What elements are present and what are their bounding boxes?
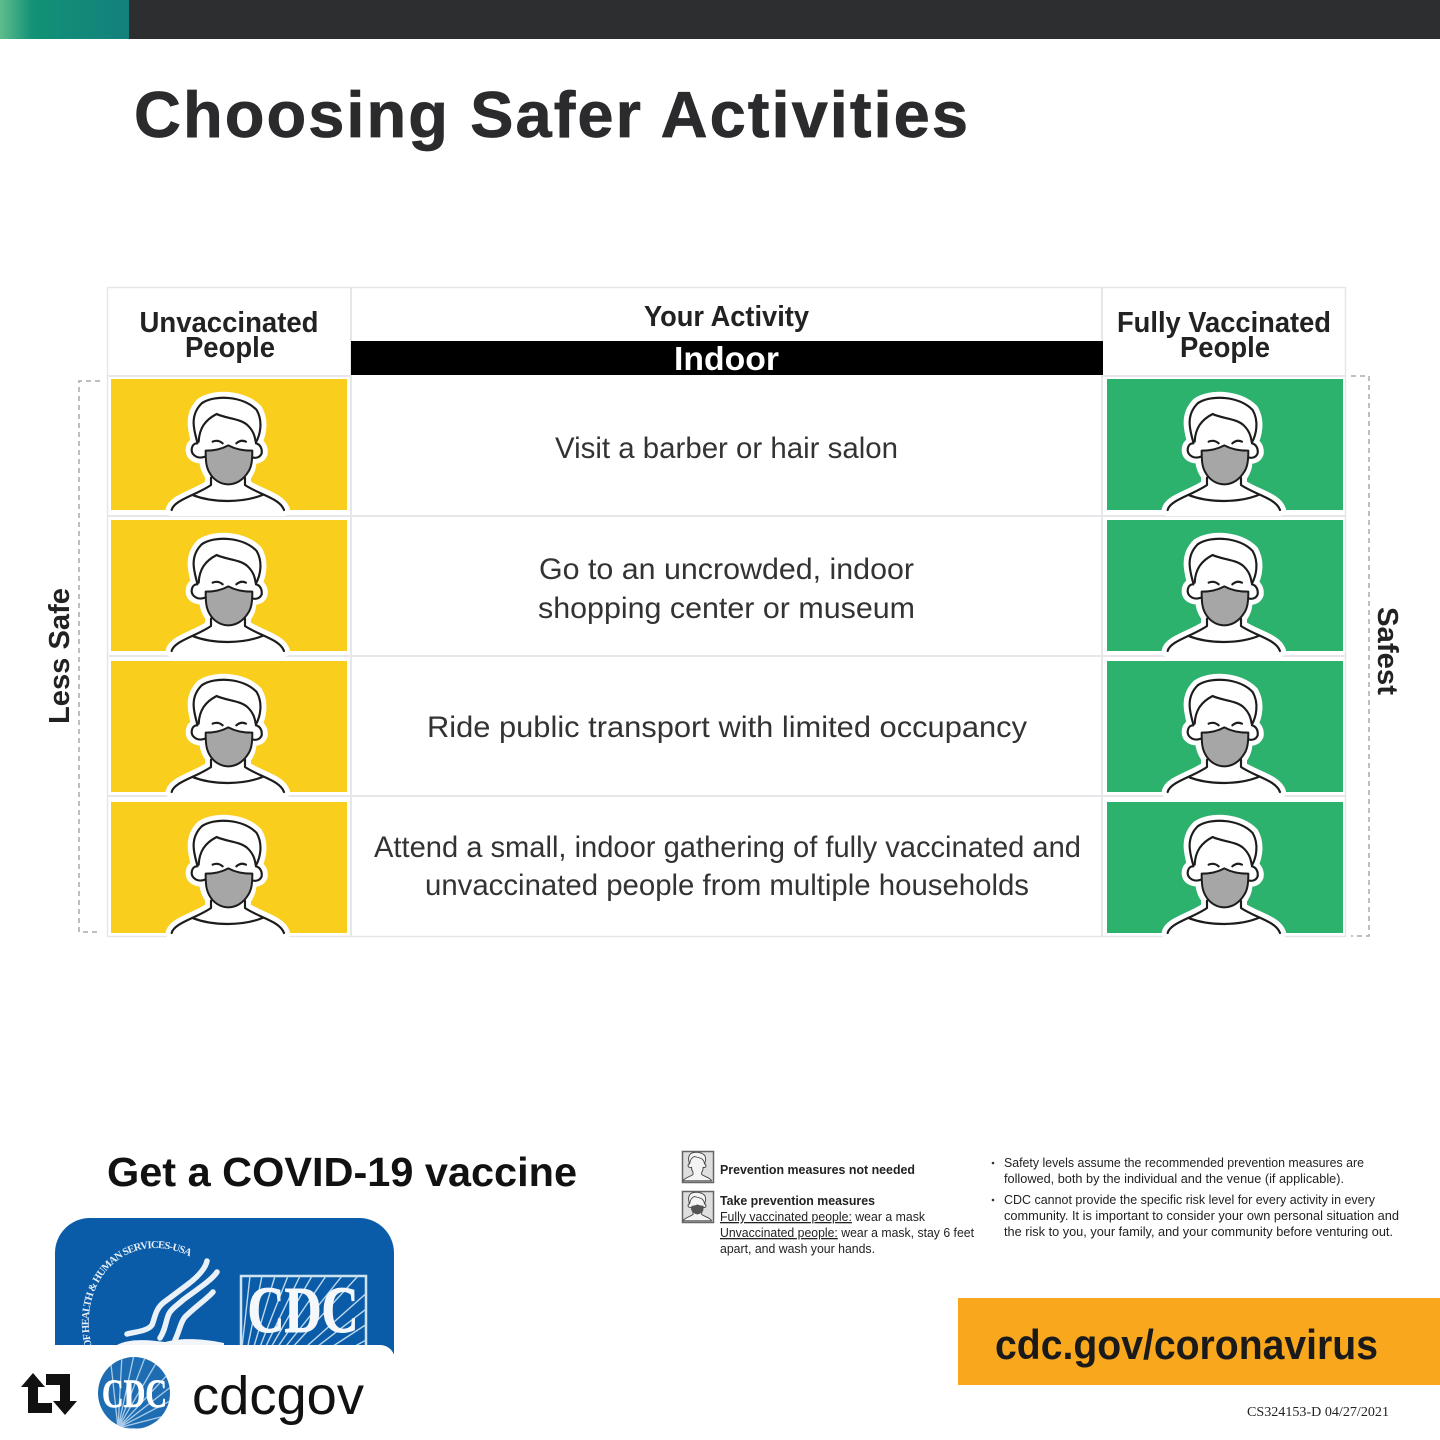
row 1: vaccinated tile [1107,379,1343,510]
notes: followed, both by the individual and the venue (if applicable). [1004,1171,1344,1186]
row 2: activity text: shopping center or museum [538,592,915,625]
column heading: fully vaccinated people: People [1180,332,1270,364]
row 2: activity text: Go to an uncrowded, indoor [539,553,914,586]
legend text: take measures: Fully vaccinated people: wear a mask [720,1209,925,1224]
icon: no mask [682,1152,714,1182]
title: Choosing Safer Activities [134,78,968,151]
heading band: indoor [351,340,1103,377]
icon: repost arrows [21,1373,77,1415]
legend text: take measures: Take prevention measures [720,1193,875,1208]
logo: hhs and cdc [55,1218,394,1354]
row 4: unvaccinated tile [111,802,347,933]
row 4: activity text: unvaccinated people from multiple households [425,869,1029,902]
row 1: unvaccinated tile [111,379,347,510]
column heading: unvaccinated people: People [185,332,275,364]
label: safest: Safest [1371,607,1403,695]
row 3: activity text: Ride public transport with limited occupancy [427,711,1027,744]
right bracket: safest scale [1351,376,1369,936]
row 2: vaccinated tile [1107,520,1343,651]
legend: prevention measures [682,1152,974,1256]
row 4: activity text: Attend a small, indoor gathering of fully vaccinated and [374,831,1081,864]
icon: cdc avatar: CDC [102,1371,167,1416]
column heading: your activity: Your Activity [644,301,809,333]
icon: cdc avatar [98,1355,172,1430]
document code: CS324153-D 04/27/2021 [1247,1405,1389,1420]
seal lettering: OF HEALTH & HUMAN SERVICES-USA [82,1241,190,1345]
row 1: activity text: Visit a barber or hair salon [555,432,898,465]
row 2: unvaccinated tile [111,520,347,651]
notes [992,1155,1399,1239]
row 3: vaccinated tile [1107,661,1343,792]
notes: CDC cannot provide the specific risk level for every activity in every [1004,1192,1375,1207]
legend text: take measures [720,1193,974,1256]
legend text: not needed: Prevention measures not needed [720,1162,915,1177]
top bar [0,0,1440,39]
column heading: unvaccinated people: Unvaccinated [140,307,318,339]
url banner [958,1298,1440,1385]
notes: community. It is important to consider your own personal situation and [1004,1208,1399,1223]
seal ribbons [127,1261,217,1340]
panel: activity table [107,287,1346,937]
repost banner [21,1345,394,1429]
label: less safe: Less Safe [44,588,76,724]
left bracket: less safe scale [79,381,100,932]
account name: cdcgov [192,1366,364,1426]
heading: get a covid-19 vaccine: Get a COVID-19 vaccine [107,1149,577,1195]
row 3: unvaccinated tile [111,661,347,792]
notes: the risk to you, your family, and your community before venturing out. [1004,1224,1393,1239]
icon: mask [682,1192,714,1222]
legend text: take measures: Unvaccinated people: wear a mask, stay 6 feet [720,1225,974,1240]
url banner: cdc.gov/coronavirus [995,1321,1378,1368]
column heading: fully vaccinated people: Fully Vaccinated [1117,307,1331,339]
notes: Safety levels assume the recommended prevention measures are [1004,1155,1364,1170]
cdc box: CDC [248,1274,358,1347]
heading band: indoor: Indoor [674,340,779,377]
row 4: vaccinated tile [1107,802,1343,933]
legend text: take measures: apart, and wash your hands. [720,1241,875,1256]
